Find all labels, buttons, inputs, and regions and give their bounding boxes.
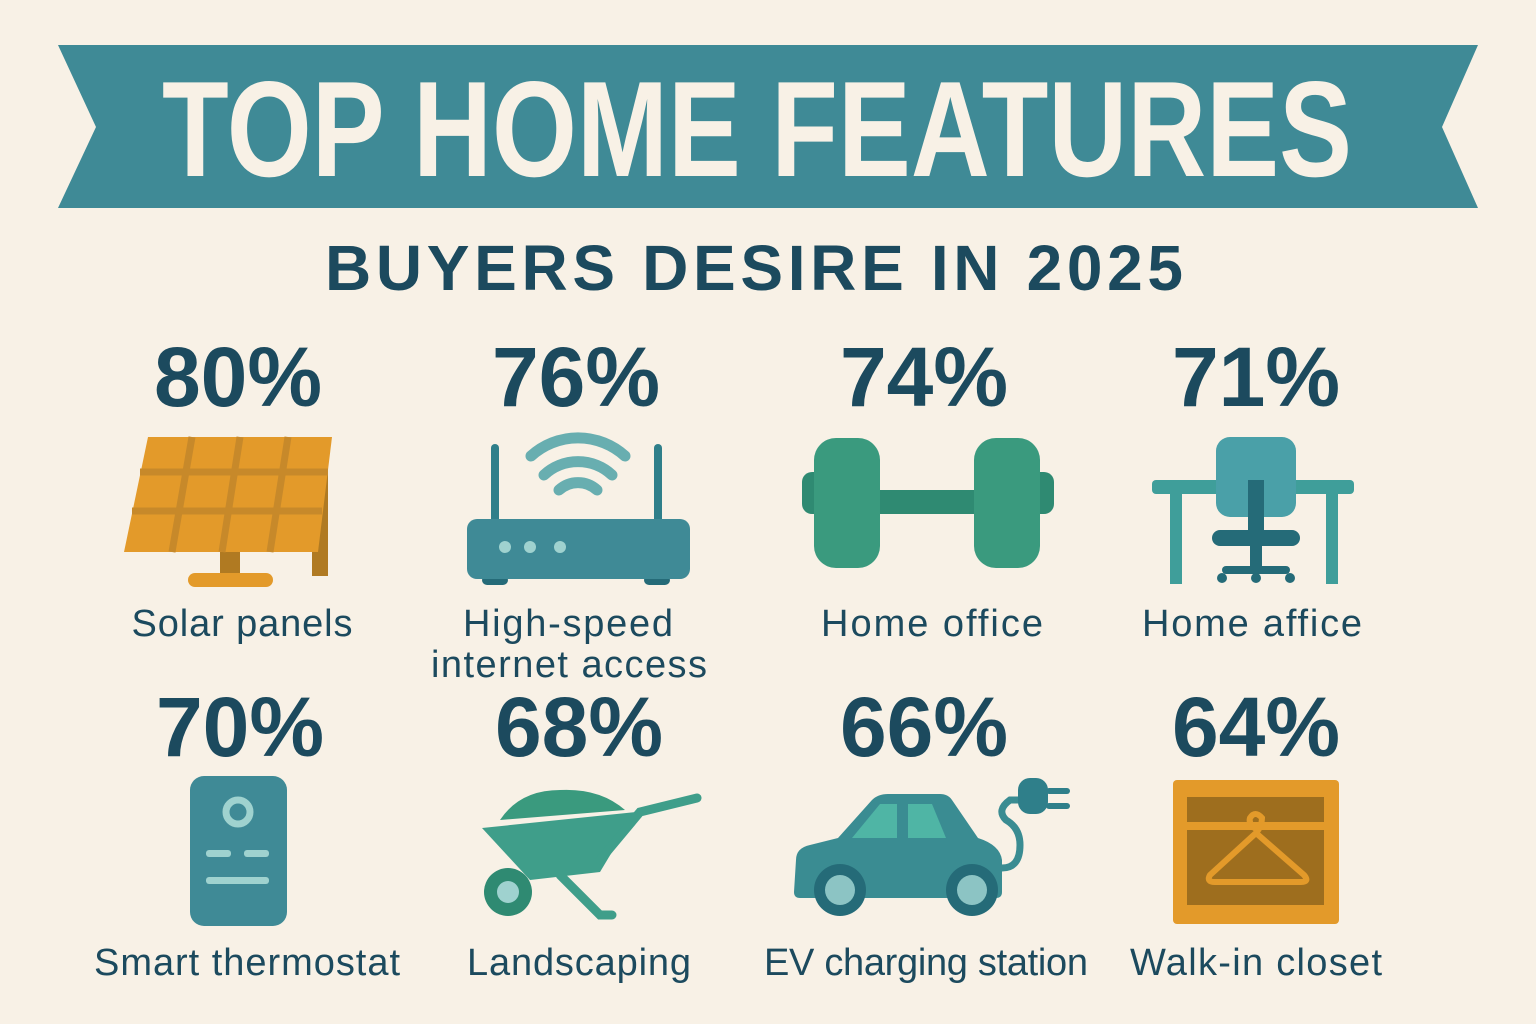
- item: EV: [764, 680, 1088, 984]
- item: home office (gym): 74%: [840, 330, 1008, 424]
- item: walk-in closet: Walk-in closet: [1130, 942, 1382, 984]
- item: home office (gym): [802, 330, 1054, 645]
- item: EV: 66%: [840, 680, 1008, 774]
- item: home office (gym): Home office: [821, 603, 1043, 645]
- item: thermostat: [94, 680, 400, 984]
- item: landscaping: 68%: [495, 680, 663, 774]
- item: landscaping: Landscaping: [467, 942, 691, 984]
- item: walk-in closet: [1130, 680, 1382, 984]
- icon: EV car: [794, 778, 1070, 916]
- item: internet: internet access: [431, 644, 707, 686]
- icon: dumbbell: [802, 438, 1054, 568]
- item: solar panels: 80%: [154, 330, 322, 424]
- icon: wheelbarrow: [482, 790, 697, 916]
- item: thermostat: 70%: [156, 680, 324, 774]
- subtitle: BUYERS DESIRE IN 2025: [325, 232, 1183, 304]
- icon: thermostat: [190, 776, 287, 926]
- icon: desk and chair: [1152, 437, 1354, 584]
- item: home affice: 71%: [1172, 330, 1340, 424]
- item: home affice: Home affice: [1142, 603, 1362, 645]
- item: internet: High-speed: [463, 603, 673, 645]
- title banner: [58, 45, 1478, 208]
- icon: closet: [1173, 780, 1339, 924]
- icon: router: [467, 438, 690, 585]
- item: internet: 76%: [492, 330, 660, 424]
- item: solar panels: [124, 330, 352, 645]
- icon: solar panel: [124, 437, 332, 587]
- item: solar panels: Solar panels: [132, 603, 352, 645]
- item: thermostat: Smart thermostat: [94, 942, 400, 984]
- item: home affice: [1142, 330, 1362, 645]
- item: landscaping: [467, 680, 697, 984]
- item: walk-in closet: 64%: [1172, 680, 1340, 774]
- item: internet: [431, 330, 707, 686]
- item: EV: EV charging station: [764, 942, 1088, 984]
